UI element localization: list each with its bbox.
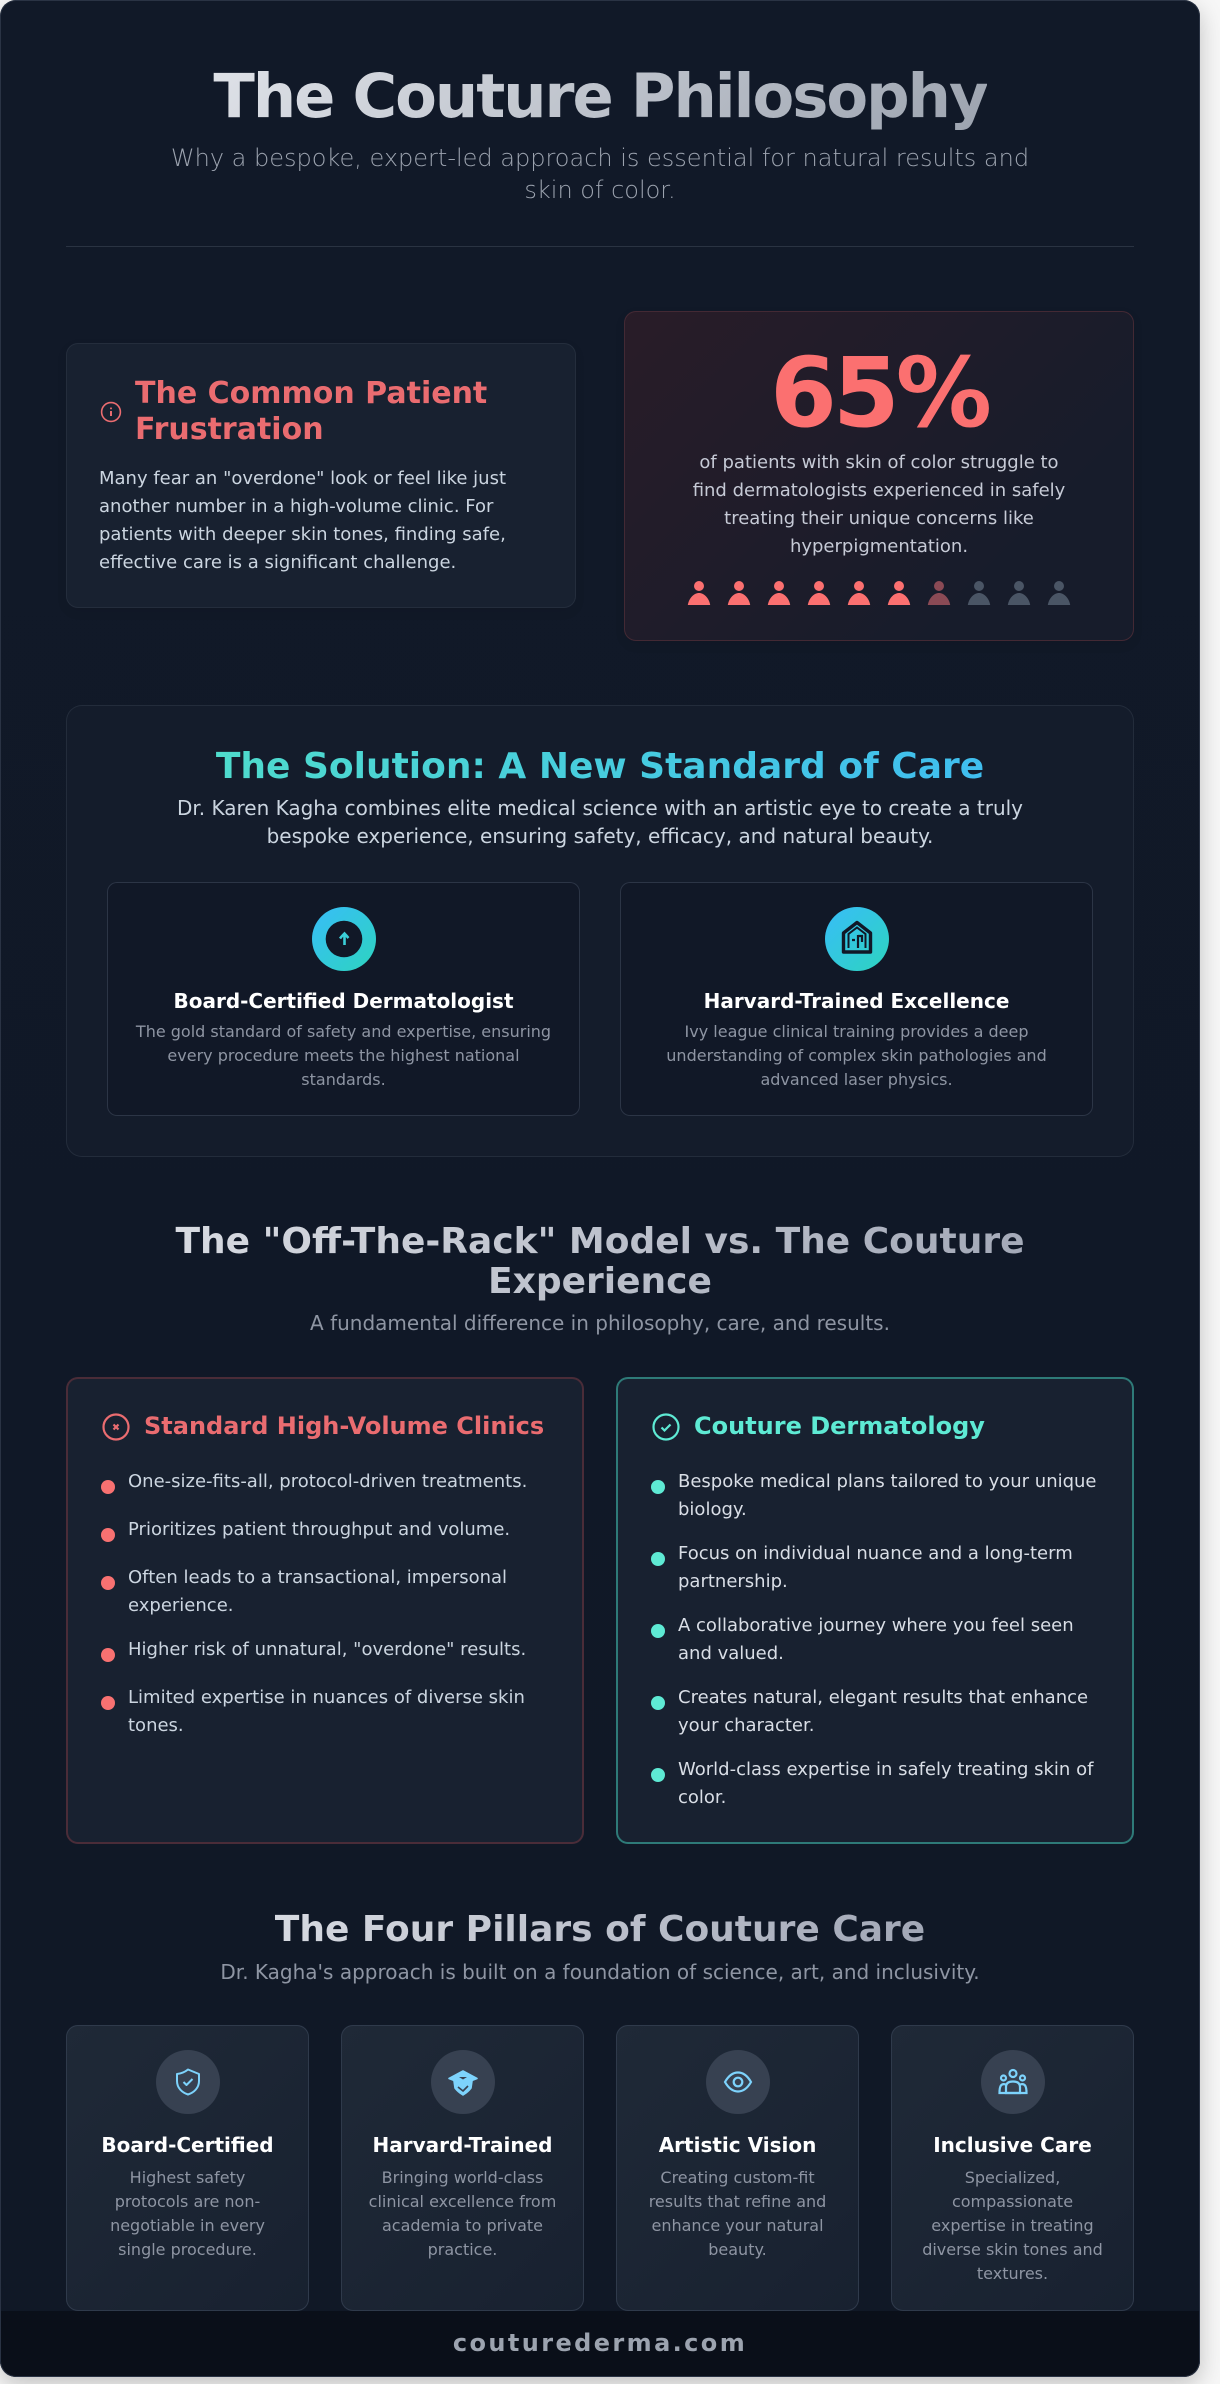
list item <box>651 1759 1094 1808</box>
title: The Couture Philosophy <box>213 62 987 132</box>
card description: Ivy league clinical training provides a deep <box>685 1022 1028 1040</box>
icon: badge with arrow <box>312 907 376 971</box>
panel: common patient frustration <box>66 343 576 608</box>
solution description <box>177 796 1023 848</box>
pillar heading: Harvard-Trained <box>373 2132 552 2156</box>
icon: group of people <box>980 2050 1044 2114</box>
body text: Many fear an "overdone" look or feel like just <box>99 468 506 489</box>
section title <box>175 1222 1025 1302</box>
section title: The "Off-The-Rack" Model vs. The Couture <box>175 1220 1025 1262</box>
card description: every procedure meets the highest national <box>167 1046 520 1064</box>
pillar description: enhance your natural <box>651 2216 824 2234</box>
pillar description: Highest safety <box>130 2168 245 2186</box>
list item: Bespoke medical plans tailored to your unique <box>678 1471 1097 1492</box>
heading: the solution: The Solution: A New Standard of Care <box>216 746 984 786</box>
card: harvard-trained excellence <box>620 882 1093 1116</box>
heading: common patient frustration: Frustration <box>135 412 324 447</box>
subtitle: skin of color. <box>524 176 676 204</box>
heading: common patient frustration <box>135 376 487 447</box>
list item: Higher risk of unnatural, "overdone" results. <box>128 1639 526 1660</box>
pillar card: harvard-trained <box>341 2025 584 2311</box>
card: board-certified dermatologist <box>107 882 580 1116</box>
pillar description <box>110 2168 265 2258</box>
icon: academic building <box>825 907 889 971</box>
list item <box>651 1687 1088 1736</box>
pillar description: textures. <box>977 2264 1048 2282</box>
icon: eye <box>706 2050 770 2114</box>
list item <box>101 1687 525 1736</box>
pictogram: 65 of 100 people <box>688 581 1070 605</box>
list item: and valued. <box>678 1643 784 1664</box>
section heading: four pillars <box>220 1909 980 1984</box>
list item: Prioritizes patient throughput and volume. <box>128 1519 510 1540</box>
list item: A collaborative journey where you feel seen <box>678 1615 1074 1636</box>
body text: patients with deeper skin tones, finding safe, <box>99 524 506 545</box>
list: standard clinic drawbacks <box>101 1471 527 1736</box>
pillar heading: Board-Certified <box>101 2132 274 2156</box>
statistic description: of patients with skin of color struggle to <box>699 452 1059 473</box>
list item: Focus on individual nuance and a long-term <box>678 1543 1073 1564</box>
list item: color. <box>678 1787 726 1808</box>
card description <box>136 1022 551 1088</box>
solution description: bespoke experience, ensuring safety, efficacy, and natural beauty. <box>267 824 933 848</box>
pillar description: Specialized, <box>965 2168 1060 2186</box>
icon: shield check <box>156 2050 220 2114</box>
panel: the solution <box>66 705 1134 1157</box>
pillar card: inclusive care <box>891 2025 1134 2311</box>
header: title and subtitle <box>171 62 1029 204</box>
list item: One-size-fits-all, protocol-driven treatments. <box>128 1471 527 1492</box>
heading: standard clinics: Standard High-Volume Clinics <box>144 1412 544 1440</box>
pillar description <box>369 2168 556 2258</box>
pillar card: artistic vision <box>616 2025 859 2311</box>
subtitle: Why a bespoke, expert-led approach is essential for natural results and <box>171 144 1029 172</box>
card heading: Board-Certified Dermatologist <box>173 989 514 1013</box>
pillar description: diverse skin tones and <box>922 2240 1103 2258</box>
statistic number: 65% <box>770 337 988 449</box>
card description: advanced laser physics. <box>760 1070 953 1088</box>
icon: x circle <box>102 1413 130 1441</box>
list item: partnership. <box>678 1571 788 1592</box>
section subtitle: Dr. Kagha's approach is built on a foundation of science, art, and inclusivity. <box>220 1960 980 1984</box>
pillar description: expertise in treating <box>931 2216 1094 2234</box>
pillar description: negotiable in every <box>110 2216 265 2234</box>
pillar description: clinical excellence from <box>369 2192 556 2210</box>
pillar description: protocols are non- <box>115 2192 260 2210</box>
card description: understanding of complex skin pathologies and <box>666 1046 1047 1064</box>
panel: 65 percent statistic <box>624 311 1134 641</box>
panel: couture dermatology <box>616 1377 1134 1844</box>
body text <box>99 468 506 573</box>
section title: Experience <box>488 1260 712 1302</box>
statistic description: find dermatologists experienced in safely <box>693 480 1065 501</box>
panel: standard high-volume clinics <box>66 1377 584 1844</box>
list item: World-class expertise in safely treating skin of <box>678 1759 1093 1780</box>
pillar description: beauty. <box>708 2240 767 2258</box>
solution description: Dr. Karen Kagha combines elite medical science with an artistic eye to create a truly <box>177 796 1023 820</box>
list item: Often leads to a transactional, impersonal <box>128 1567 507 1588</box>
pillar description <box>649 2168 826 2258</box>
list item: your character. <box>678 1715 814 1736</box>
section title: The Four Pillars of Couture Care <box>275 1909 925 1950</box>
pillar description: results that refine and <box>649 2192 826 2210</box>
body text: effective care is a significant challenge. <box>99 552 456 573</box>
heading: common patient frustration: The Common Patient <box>135 376 487 411</box>
section subtitle: A fundamental difference in philosophy, care, and results. <box>310 1311 890 1335</box>
pillar description <box>922 2168 1103 2282</box>
list item: tones. <box>128 1715 184 1736</box>
list item: biology. <box>678 1499 747 1520</box>
card description: The gold standard of safety and expertise, ensuring <box>136 1022 551 1040</box>
footer <box>0 2311 1200 2377</box>
icon: check circle <box>652 1413 680 1441</box>
pillar description: compassionate <box>952 2192 1073 2210</box>
list item <box>651 1543 1073 1592</box>
list item <box>651 1615 1074 1664</box>
pillar description: practice. <box>428 2240 497 2258</box>
body text: another number in a high-volume clinic. For <box>99 496 493 517</box>
icon: info circle <box>100 402 122 422</box>
pillar heading: Artistic Vision <box>659 2132 816 2156</box>
footer website: couturederma.com <box>453 2329 747 2357</box>
card heading: Harvard-Trained Excellence <box>704 989 1009 1013</box>
icon: graduation cap <box>430 2050 494 2114</box>
subtitle <box>171 144 1029 204</box>
pillar description: Creating custom-fit <box>660 2168 815 2186</box>
list item <box>101 1567 507 1616</box>
list item: Creates natural, elegant results that enhance <box>678 1687 1088 1708</box>
card description: standards. <box>301 1070 386 1088</box>
statistic description: hyperpigmentation. <box>790 536 968 557</box>
heading: couture dermatology: Couture Dermatology <box>694 1412 985 1440</box>
pillar description: academia to private <box>382 2216 543 2234</box>
statistic description: treating their unique concerns like <box>724 508 1034 529</box>
list item <box>651 1471 1097 1520</box>
statistic description <box>693 452 1065 557</box>
pillar description: Bringing world-class <box>382 2168 543 2186</box>
card description <box>666 1022 1047 1088</box>
list item: experience. <box>128 1595 234 1616</box>
section heading: off-the-rack vs couture <box>175 1220 1025 1335</box>
pillar heading: Inclusive Care <box>933 2132 1092 2156</box>
pillar card: board-certified <box>66 2025 309 2311</box>
list item: Limited expertise in nuances of diverse skin <box>128 1687 525 1708</box>
pillar description: single procedure. <box>118 2240 257 2258</box>
list: couture benefits <box>651 1471 1097 1808</box>
